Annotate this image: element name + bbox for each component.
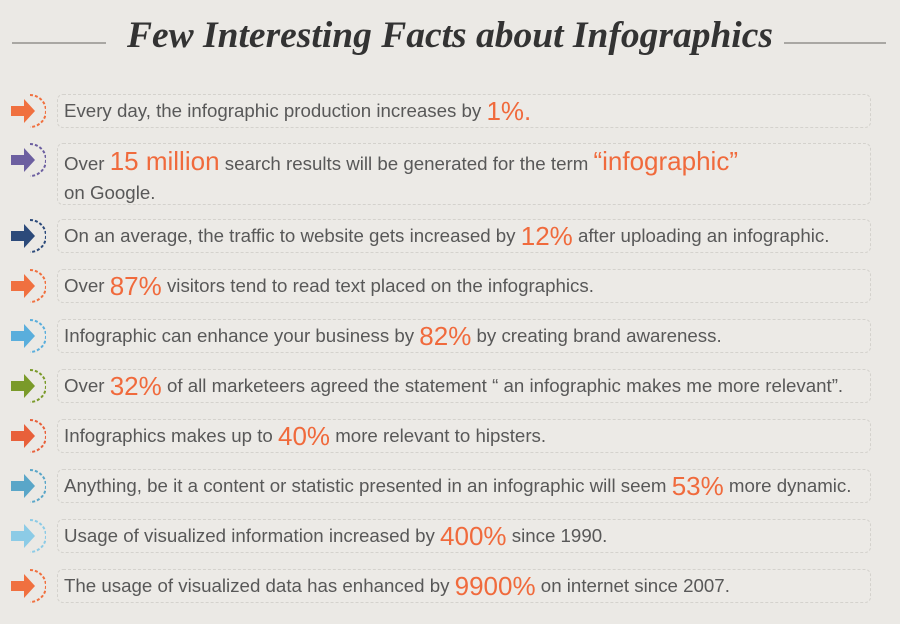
fact 8: Anything, be it a content or statistic presented in an infographic will seem more dynamic. — [64, 475, 851, 496]
fact 2: Over 15 million search results will be generated for the term “infographic” — [64, 146, 738, 176]
fact 4 — [57, 269, 871, 303]
fact 10: 9900% — [455, 570, 536, 600]
fact 10: The usage of visualized data has enhanced by on internet since 2007. — [64, 575, 730, 596]
fact 7: Infographics makes up to more relevant to hipsters. — [64, 425, 546, 446]
icon: arrow 10 — [11, 569, 46, 603]
fact 6: 32% — [110, 370, 162, 400]
icon: arrow 6 — [11, 369, 46, 403]
fact 5: 82% — [419, 320, 471, 350]
fact 6 — [57, 369, 871, 403]
fact 5 — [57, 319, 871, 353]
fact 4: Over visitors tend to read text placed on the infographics. — [64, 275, 594, 296]
fact 10 — [57, 569, 871, 603]
icon: arrow 5 — [11, 319, 46, 353]
fact 4: 87% — [110, 270, 162, 300]
icon: arrow 7 — [11, 419, 46, 453]
icon: arrow 2 — [11, 143, 46, 177]
icon: arrow 4 — [11, 269, 46, 303]
icon: arrow 1 — [11, 94, 46, 128]
fact 1 — [57, 94, 871, 128]
icon: arrow 8 — [11, 469, 46, 503]
fact 3: On an average, the traffic to website gets increased by after uploading an infographic. — [64, 225, 829, 246]
fact 9 — [57, 519, 871, 553]
fact 1: Every day, the infographic production increases by — [64, 100, 481, 121]
fact 2: on Google. — [64, 182, 155, 203]
fact 5: Infographic can enhance your business by by creating brand awareness. — [64, 325, 722, 346]
fact 7: 40% — [278, 420, 330, 450]
fact 3: 12% — [521, 220, 573, 250]
fact 8: 53% — [672, 470, 724, 500]
fact 7 — [57, 419, 871, 453]
fact 2 — [57, 143, 871, 205]
fact 6: Over of all marketeers agreed the statement “ an infographic makes me more relevant”. — [64, 375, 843, 396]
icon: arrow 3 — [11, 219, 46, 253]
fact 1: 1%. — [486, 96, 531, 126]
icon: arrow 9 — [11, 519, 46, 553]
fact 9: Usage of visualized information increased by since 1990. — [64, 525, 607, 546]
fact 3 — [57, 219, 871, 253]
title: Few Interesting Facts about Infographics — [127, 15, 773, 56]
fact 8 — [57, 469, 871, 503]
fact 9: 400% — [440, 520, 507, 550]
